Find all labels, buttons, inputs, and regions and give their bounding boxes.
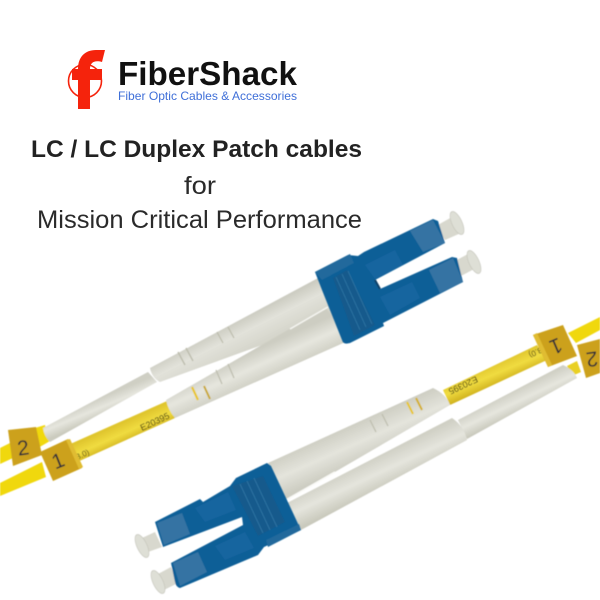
marker tag 1 xyxy=(40,439,83,481)
ferrule 1 xyxy=(436,210,467,240)
marker tag 2 xyxy=(8,427,42,466)
marker tag 1: 1 xyxy=(48,449,68,474)
title: third line: Mission Critical Performance xyxy=(37,206,362,234)
white boot 4 xyxy=(286,418,467,530)
logo xyxy=(68,50,298,109)
white strain relief right xyxy=(458,365,577,439)
blue housing lower xyxy=(155,463,301,588)
ferrule 2 xyxy=(453,249,484,276)
blue housing xyxy=(315,219,463,344)
ferrule 4 xyxy=(148,567,178,595)
logo wordmark: FiberShack xyxy=(118,55,298,92)
white boot 2 xyxy=(166,307,350,418)
yellow jacket 1: (3.0) xyxy=(72,448,91,463)
upper left cable assembly xyxy=(0,277,350,496)
white boot 1 xyxy=(150,277,345,382)
white strain relief 2 xyxy=(43,372,157,442)
lower connector: LC duplex xyxy=(132,463,301,595)
white boot 3 xyxy=(268,388,450,501)
logo tagline: Fiber Optic Cables & Accessories xyxy=(118,89,297,103)
marker tag 2 right: 2 xyxy=(585,346,599,371)
marker tag 1 right: 1 xyxy=(546,333,566,358)
yellow jacket right: (3.0) xyxy=(527,344,546,359)
marker tag 1 right xyxy=(533,325,577,367)
yellow jacket right: E20395 xyxy=(447,374,479,396)
thin yellow cable right 1 xyxy=(568,317,600,343)
yellow jacket 1 xyxy=(68,401,175,463)
thin yellow cable right 2 xyxy=(567,361,581,376)
thin yellow cable 1 xyxy=(0,462,46,496)
lower right cable assembly xyxy=(268,317,600,530)
marker tag 2 right xyxy=(577,339,600,378)
upper connector: LC duplex xyxy=(315,210,484,344)
yellow jacket 1: E20395 xyxy=(139,411,171,433)
title: first line: LC / LC Duplex Patch cables xyxy=(31,136,362,163)
marker tag 2: 2 xyxy=(16,436,31,461)
logo icon: red letter f with circle xyxy=(68,50,105,109)
ferrule 3 xyxy=(132,532,162,559)
title: second line: for xyxy=(184,172,216,200)
thin yellow cable 2 xyxy=(0,425,50,464)
yellow jacket right xyxy=(443,344,547,405)
